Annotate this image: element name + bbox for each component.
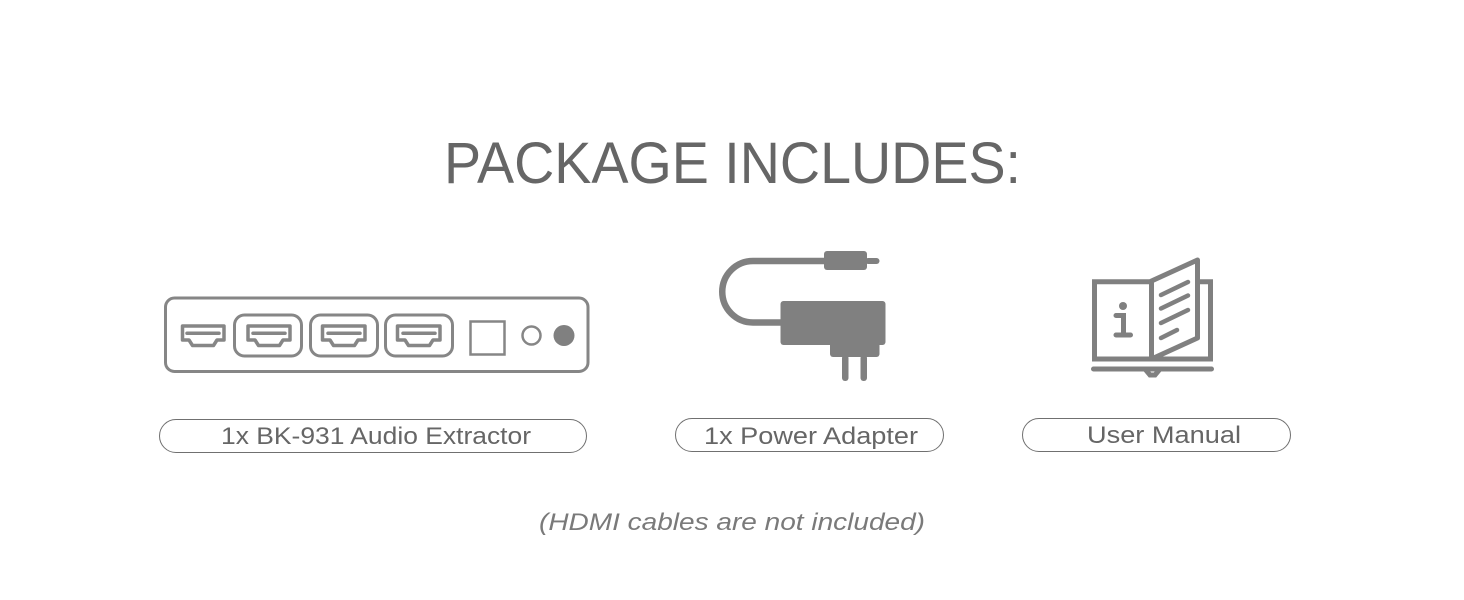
adapter neck <box>830 340 880 357</box>
turned page <box>1152 260 1198 359</box>
barrel plug <box>824 251 867 270</box>
label: audio extractor: 1x BK-931 Audio Extractor <box>221 423 531 450</box>
label: power adapter: 1x Power Adapter <box>704 423 918 450</box>
cable <box>722 261 826 322</box>
prong right <box>860 355 867 381</box>
plug tip <box>865 258 880 264</box>
note: cables not included: (HDMI cables are not included) <box>539 509 925 536</box>
power jack <box>554 325 574 346</box>
prong left <box>842 355 848 381</box>
HDMI port framed 2 <box>310 315 378 356</box>
device body <box>166 298 588 372</box>
icon: user manual book <box>1094 260 1212 375</box>
HDMI port bare <box>182 326 224 346</box>
left and back pages <box>1094 282 1210 359</box>
book base <box>1094 369 1212 375</box>
page text lines <box>1161 282 1188 338</box>
HDMI port framed 3 <box>386 315 452 356</box>
icon: power adapter <box>722 251 886 381</box>
HDMI port framed 1 <box>234 315 302 356</box>
label: audio extractor <box>160 420 586 452</box>
title: PACKAGE INCLUDES: <box>444 131 1021 196</box>
info symbol <box>1116 302 1130 335</box>
label: user manual <box>1022 418 1290 452</box>
icon: audio extractor device <box>166 298 588 372</box>
label: user manual: User Manual <box>1087 422 1241 449</box>
adapter body <box>780 301 886 345</box>
optical port <box>470 322 504 354</box>
audio jack <box>522 326 540 344</box>
label: power adapter <box>676 418 944 452</box>
